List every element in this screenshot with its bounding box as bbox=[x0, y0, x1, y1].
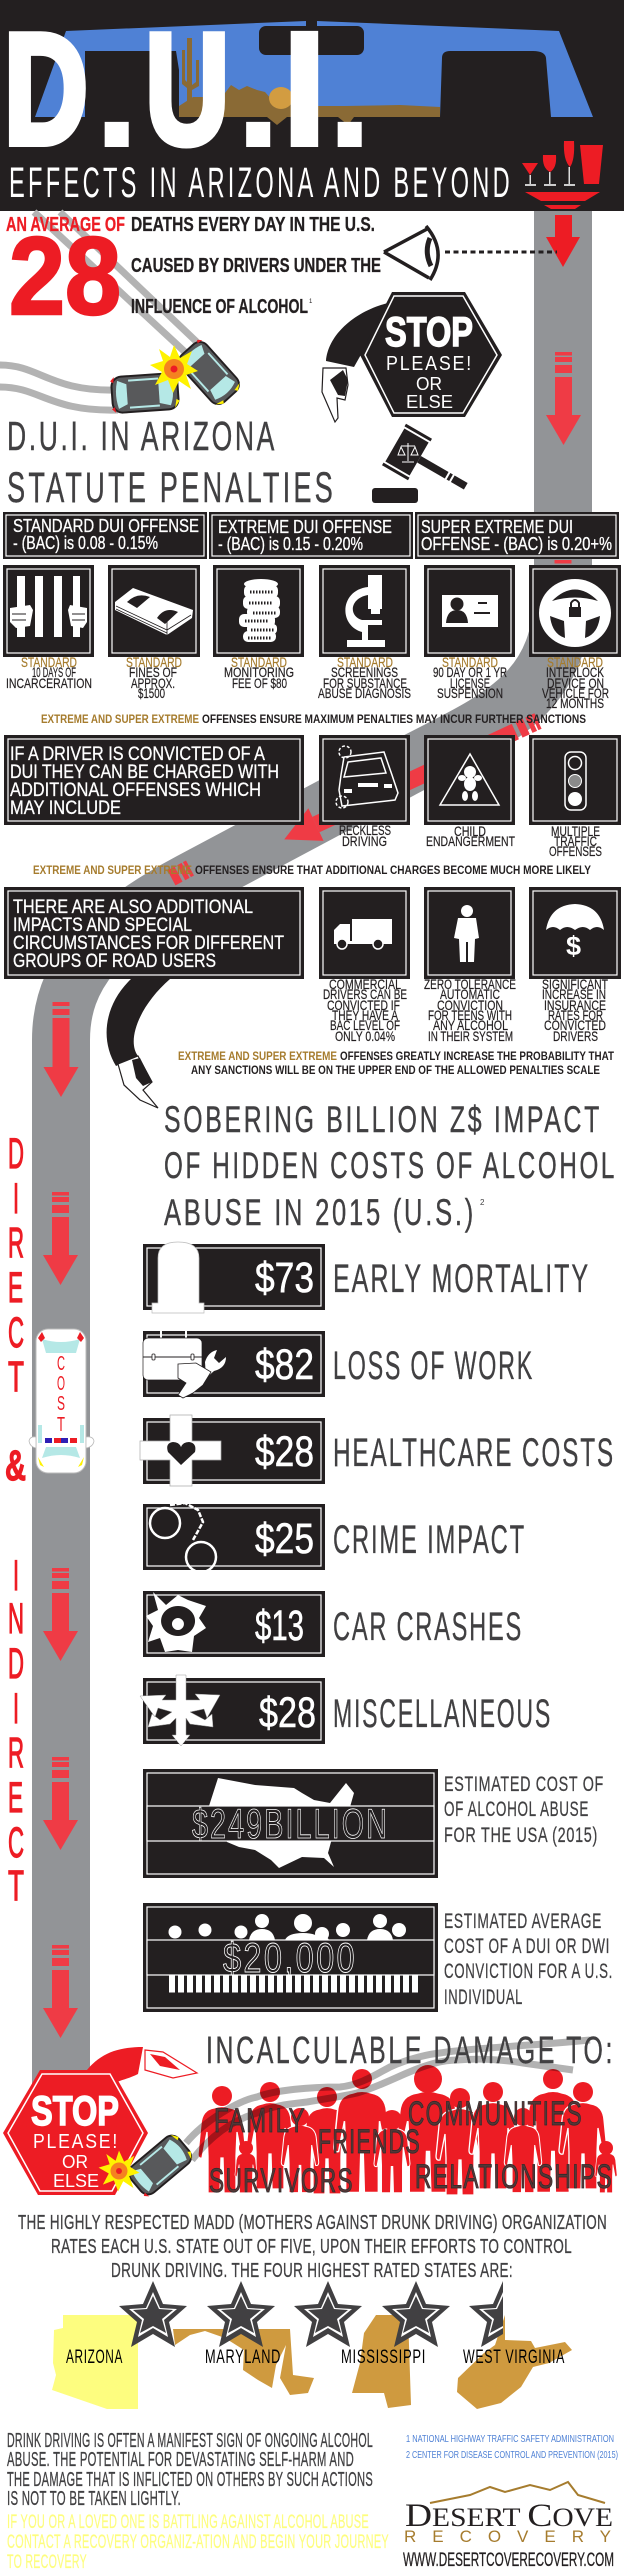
arm pointing down bbox=[107, 979, 170, 1108]
label: STANDARD bbox=[126, 654, 182, 670]
icon: eye bbox=[384, 226, 557, 280]
text: average cost: INDIVIDUAL bbox=[444, 1986, 523, 2009]
damage labels: SURVIVORS bbox=[209, 2162, 354, 2200]
ambulance label: O bbox=[57, 1373, 65, 1395]
text: closing paragraph: ABUSE. THE POTENTIAL FOR DEVASTATING SELF-HARM AND bbox=[7, 2449, 354, 2471]
ambulance label: S bbox=[57, 1393, 65, 1415]
panel: special circumstances: GROUPS OF ROAD USERS bbox=[13, 951, 216, 972]
vertical word: direct & indirect: R bbox=[8, 1219, 24, 1267]
stop sign red: OR bbox=[62, 2152, 88, 2172]
state labels: MARYLAND bbox=[205, 2347, 281, 2368]
cactus bbox=[182, 38, 199, 117]
text: average cost bbox=[444, 1910, 613, 2009]
panel: additional offenses: MAY INCLUDE bbox=[10, 798, 121, 819]
text: MADD bbox=[18, 2212, 607, 2282]
label bbox=[339, 822, 391, 849]
icon box: zero tolerance bbox=[424, 887, 515, 979]
vertical word: direct & indirect: N bbox=[8, 1595, 24, 1643]
title D.U.I.: . bbox=[240, 22, 277, 174]
ambulance label: C bbox=[57, 1353, 65, 1375]
note: additional charges bbox=[33, 863, 591, 877]
stop sign black: STOP bbox=[385, 308, 473, 355]
icon box: incarceration bbox=[3, 565, 94, 657]
text: closing paragraph bbox=[7, 2430, 373, 2510]
icon box: insurance bbox=[529, 887, 621, 979]
title D.U.I.: D bbox=[4, 1, 88, 178]
stat: average deaths: AN AVERAGE OF bbox=[6, 214, 125, 236]
label: ANY ALCOHOL bbox=[433, 1017, 508, 1033]
icon box: license suspension bbox=[424, 565, 515, 657]
cost row: healthcare bbox=[140, 1415, 615, 1486]
icon box: interlock device bbox=[529, 565, 621, 657]
title D.U.I. bbox=[4, 0, 369, 180]
label: CONVICTED IF bbox=[327, 997, 400, 1013]
label: ABUSE DIAGNOSIS bbox=[318, 685, 411, 701]
title D.U.I.: U bbox=[145, 1, 229, 178]
panel: special circumstances: THERE ARE ALSO ADDITIONAL bbox=[13, 897, 253, 918]
vertical word: direct & indirect: I bbox=[13, 1685, 19, 1733]
map: West Virginia bbox=[457, 2315, 572, 2409]
label bbox=[426, 823, 515, 849]
cost row: crime: $25 bbox=[255, 1515, 314, 1563]
label: AUTOMATIC bbox=[440, 986, 500, 1002]
offense box: super extreme: SUPER EXTREME DUI bbox=[421, 517, 573, 537]
cost row: healthcare: $28 bbox=[255, 1428, 314, 1476]
label: RECKLESS bbox=[339, 822, 391, 838]
stop sign black: OR bbox=[416, 374, 442, 394]
icon box: commercial drivers bbox=[319, 887, 410, 979]
label bbox=[424, 976, 516, 1044]
skid marks top bbox=[0, 212, 200, 410]
label: DRIVERS bbox=[553, 1028, 598, 1044]
label: BAC LEVEL OF bbox=[330, 1017, 400, 1033]
vertical word: direct & indirect: C bbox=[8, 1819, 24, 1867]
text: call to action: IF YOU OR A LOVED ONE IS BATTLING AGAINST ALCOHOL ABUSE bbox=[7, 2512, 369, 2533]
heading: sobering impact: ABUSE IN 2015 (U.S.) bbox=[164, 1192, 476, 1233]
title D.U.I.: . bbox=[98, 22, 136, 174]
panel: additional offenses: IF A DRIVER IS CONVICTED OF A bbox=[10, 744, 265, 765]
offense box: super extreme bbox=[415, 512, 619, 559]
stop sign black: PLEASE! bbox=[386, 353, 473, 375]
panel: special circumstances: IMPACTS AND SPECIAL bbox=[13, 915, 192, 936]
offense box: standard: STANDARD DUI OFFENSE bbox=[13, 516, 199, 536]
cost row: car crashes: $13 bbox=[255, 1602, 304, 1650]
state labels bbox=[66, 2347, 565, 2368]
cost row: miscellaneous: $28 bbox=[259, 1689, 316, 1737]
vertical word: direct & indirect: I bbox=[13, 1552, 19, 1600]
label: FOR SUBSTANCE bbox=[323, 675, 407, 691]
label: INTERLOCK bbox=[546, 664, 604, 680]
text: estimated cost bbox=[444, 1773, 604, 1847]
label: IN THEIR SYSTEM bbox=[428, 1028, 513, 1044]
panel: USA cost bbox=[143, 1769, 438, 1878]
icon box: reckless driving bbox=[319, 735, 410, 825]
vertical word: direct & indirect: E bbox=[8, 1264, 23, 1312]
note: additional charges: EXTREME AND SUPER EXTREME bbox=[33, 863, 192, 877]
road arrows bbox=[43, 352, 581, 2038]
label: 12 MONTHS bbox=[546, 695, 604, 711]
icon: drinks bbox=[522, 141, 603, 209]
panel: additional offenses bbox=[4, 735, 304, 825]
state labels: ARIZONA bbox=[66, 2347, 123, 2368]
label: CHILD bbox=[454, 823, 486, 839]
offense box: standard bbox=[3, 512, 207, 559]
vertical word: direct & indirect: R bbox=[8, 1729, 24, 1777]
vertical word: direct & indirect: D bbox=[8, 1640, 24, 1688]
label bbox=[542, 976, 608, 1044]
label: DRIVING bbox=[342, 833, 387, 849]
heading: sobering impact bbox=[164, 1099, 617, 1233]
stat: average deaths: INFLUENCE OF ALCOHOL bbox=[131, 296, 308, 318]
label: STANDARD bbox=[21, 654, 77, 670]
offense box: extreme bbox=[209, 512, 413, 559]
dotted sight line bbox=[445, 250, 557, 254]
panel: additional offenses: DUI THEY CAN BE CHARGED WITH bbox=[10, 762, 279, 783]
label: ONLY 0.04% bbox=[335, 1028, 395, 1044]
red arm bbox=[80, 2047, 197, 2082]
windshield bbox=[35, 21, 593, 117]
label: ZERO TOLERANCE bbox=[424, 976, 516, 992]
panel: USA cost: $249BILLION bbox=[192, 1800, 389, 1847]
offense box: extreme: - (BAC) is 0.15 - 0.20% bbox=[218, 534, 363, 554]
vertical word: direct & indirect: E bbox=[8, 1774, 23, 1822]
text: call to action bbox=[7, 2512, 389, 2572]
label: TRAFFIC bbox=[554, 833, 597, 849]
label: INSURANCE bbox=[544, 997, 606, 1013]
label bbox=[126, 654, 182, 701]
map: Mississippi bbox=[352, 2315, 411, 2408]
label bbox=[433, 654, 507, 701]
desert landscape bbox=[179, 85, 440, 125]
heading: sobering impact: 2 bbox=[480, 1198, 485, 1207]
damage labels: FAMILY bbox=[214, 2102, 306, 2140]
cost row: loss of work bbox=[143, 1328, 534, 1398]
cost row: early mortality: $73 bbox=[255, 1254, 314, 1302]
stop sign red: PLEASE! bbox=[33, 2131, 119, 2153]
icon box: screenings bbox=[319, 565, 410, 657]
label: FOR TEENS WITH bbox=[428, 1007, 512, 1023]
icon box: fines bbox=[108, 565, 200, 657]
road bbox=[61, 205, 563, 2100]
crashed cars bbox=[110, 337, 244, 414]
people silhouettes bbox=[198, 2065, 617, 2195]
state labels: WEST VIRGINIA bbox=[463, 2347, 565, 2368]
label: SUSPENSION bbox=[437, 685, 503, 701]
note: maximum penalties bbox=[41, 712, 586, 726]
vertical word: direct & indirect: T bbox=[8, 1862, 24, 1910]
label: STANDARD bbox=[442, 654, 498, 670]
stop sign red bbox=[3, 2070, 148, 2195]
references bbox=[406, 2433, 618, 2461]
vertical word: direct & indirect: C bbox=[8, 1309, 24, 1357]
number 28: 28 bbox=[9, 215, 121, 338]
crashed car lower bbox=[99, 2130, 196, 2200]
label: STANDARD bbox=[547, 654, 603, 670]
label bbox=[224, 654, 294, 691]
damage labels bbox=[209, 2095, 613, 2200]
label: STANDARD bbox=[337, 654, 393, 670]
label: 10 DAYS OF bbox=[32, 664, 76, 680]
label: 90 DAY OR 1 YR bbox=[433, 664, 507, 680]
icon box: insurance: $ bbox=[566, 931, 581, 961]
offense box: standard: - (BAC) is 0.08 - 0.15% bbox=[13, 533, 158, 553]
label: APPROX. bbox=[131, 675, 175, 691]
ambulance bbox=[29, 1329, 94, 1473]
label bbox=[318, 654, 411, 701]
note: upper end of scale: EXTREME AND SUPER EXTREME bbox=[178, 1049, 337, 1063]
label: FINES OF bbox=[129, 664, 177, 680]
star rating bbox=[119, 2281, 537, 2347]
label bbox=[542, 654, 609, 711]
vertical word: direct & indirect: & bbox=[5, 1442, 26, 1490]
cost row: early mortality bbox=[143, 1242, 590, 1313]
label: CONVICTION bbox=[437, 997, 503, 1013]
cost row: loss of work: $82 bbox=[255, 1341, 314, 1389]
vertical word: direct & indirect: I bbox=[13, 1175, 19, 1223]
icon box: multiple offenses bbox=[529, 735, 621, 825]
label: MULTIPLE bbox=[551, 823, 600, 839]
label: ENDANGERMENT bbox=[426, 833, 515, 849]
title D.U.I.: I bbox=[282, 0, 327, 180]
panel: special circumstances bbox=[4, 887, 304, 979]
heading: statute penalties: STATUTE PENALTIES bbox=[7, 464, 336, 512]
label: MONITORING bbox=[224, 664, 294, 680]
vertical word: direct & indirect bbox=[5, 1130, 26, 1910]
stop sign black: ELSE bbox=[406, 392, 453, 412]
note: maximum penalties: EXTREME AND SUPER EXTREME bbox=[41, 712, 199, 726]
label: THEY HAVE A bbox=[332, 1007, 398, 1023]
rear view mirror bbox=[259, 26, 364, 55]
label: COMMERCIAL bbox=[329, 976, 401, 992]
stat: average deaths: 1 bbox=[309, 299, 313, 305]
icon box: child endangerment bbox=[424, 735, 515, 825]
USA map bbox=[209, 1778, 354, 1868]
title D.U.I.: . bbox=[331, 22, 369, 174]
arm pointing bbox=[322, 302, 392, 422]
ambulance label: T bbox=[57, 1414, 65, 1436]
label: DEVICE ON bbox=[547, 675, 604, 691]
icon: gavel bbox=[372, 424, 478, 507]
panel: individual cost: $20,000 bbox=[223, 1934, 357, 1981]
heading: statute penalties: D.U.I. IN ARIZONA bbox=[7, 413, 277, 459]
label bbox=[323, 976, 407, 1044]
stop sign black bbox=[360, 292, 502, 417]
sun bbox=[269, 87, 293, 109]
label bbox=[6, 654, 92, 691]
label: OFFENSES bbox=[549, 843, 602, 859]
logo: Desert Cove Recovery: DESERT COVE bbox=[405, 2498, 613, 2534]
map: Arizona bbox=[52, 2315, 138, 2409]
first arrow bbox=[546, 215, 580, 267]
stop sign red: ELSE bbox=[53, 2171, 99, 2191]
logo: Desert Cove Recovery: RECOVERY bbox=[404, 2527, 611, 2546]
damage labels: FRIENDS bbox=[318, 2123, 421, 2161]
skid marks bottom bbox=[186, 2040, 590, 2160]
label: STANDARD bbox=[231, 654, 287, 670]
label: CONVICTED bbox=[544, 1017, 606, 1033]
label: FEE OF $80 bbox=[232, 675, 287, 691]
label: $1500 bbox=[138, 685, 165, 701]
stat: average deaths: DEATHS EVERY DAY IN THE U.S. bbox=[131, 214, 375, 236]
icon box: monitoring fee bbox=[213, 565, 304, 657]
ambulance label bbox=[57, 1353, 65, 1436]
logo: Desert Cove Recovery bbox=[403, 2482, 614, 2571]
label: INCARCERATION bbox=[6, 675, 92, 691]
stop sign red: STOP bbox=[31, 2087, 119, 2134]
vertical word: direct & indirect: T bbox=[8, 1353, 24, 1401]
offense box: extreme: EXTREME DUI OFFENSE bbox=[218, 517, 392, 537]
map: Maryland bbox=[173, 2329, 314, 2395]
label: LICENSE bbox=[450, 675, 490, 691]
cost row: crime bbox=[143, 1503, 526, 1572]
heading: statute penalties bbox=[7, 413, 336, 512]
state labels: MISSISSIPPI bbox=[341, 2347, 426, 2368]
panel: individual cost bbox=[143, 1903, 438, 2012]
stat: average deaths bbox=[6, 214, 381, 338]
vertical word: direct & indirect: D bbox=[8, 1130, 24, 1178]
people bbox=[168, 1914, 406, 1941]
header band bbox=[0, 0, 624, 211]
note: upper end of scale bbox=[178, 1049, 615, 1077]
label: DRIVERS CAN BE bbox=[323, 986, 407, 1002]
panel: special circumstances: CIRCUMSTANCES FOR DIFFERENT bbox=[13, 933, 284, 954]
cost row: miscellaneous bbox=[140, 1675, 552, 1746]
cost row: car crashes bbox=[143, 1591, 523, 1657]
label bbox=[549, 823, 602, 859]
text: closing paragraph: IS NOT TO BE TAKEN LIGHTLY. bbox=[7, 2488, 181, 2510]
stat: average deaths: CAUSED BY DRIVERS UNDER THE bbox=[131, 255, 381, 277]
label: SCREENINGS bbox=[331, 664, 398, 680]
panel: additional offenses: ADDITIONAL OFFENSES WHICH bbox=[10, 780, 261, 801]
